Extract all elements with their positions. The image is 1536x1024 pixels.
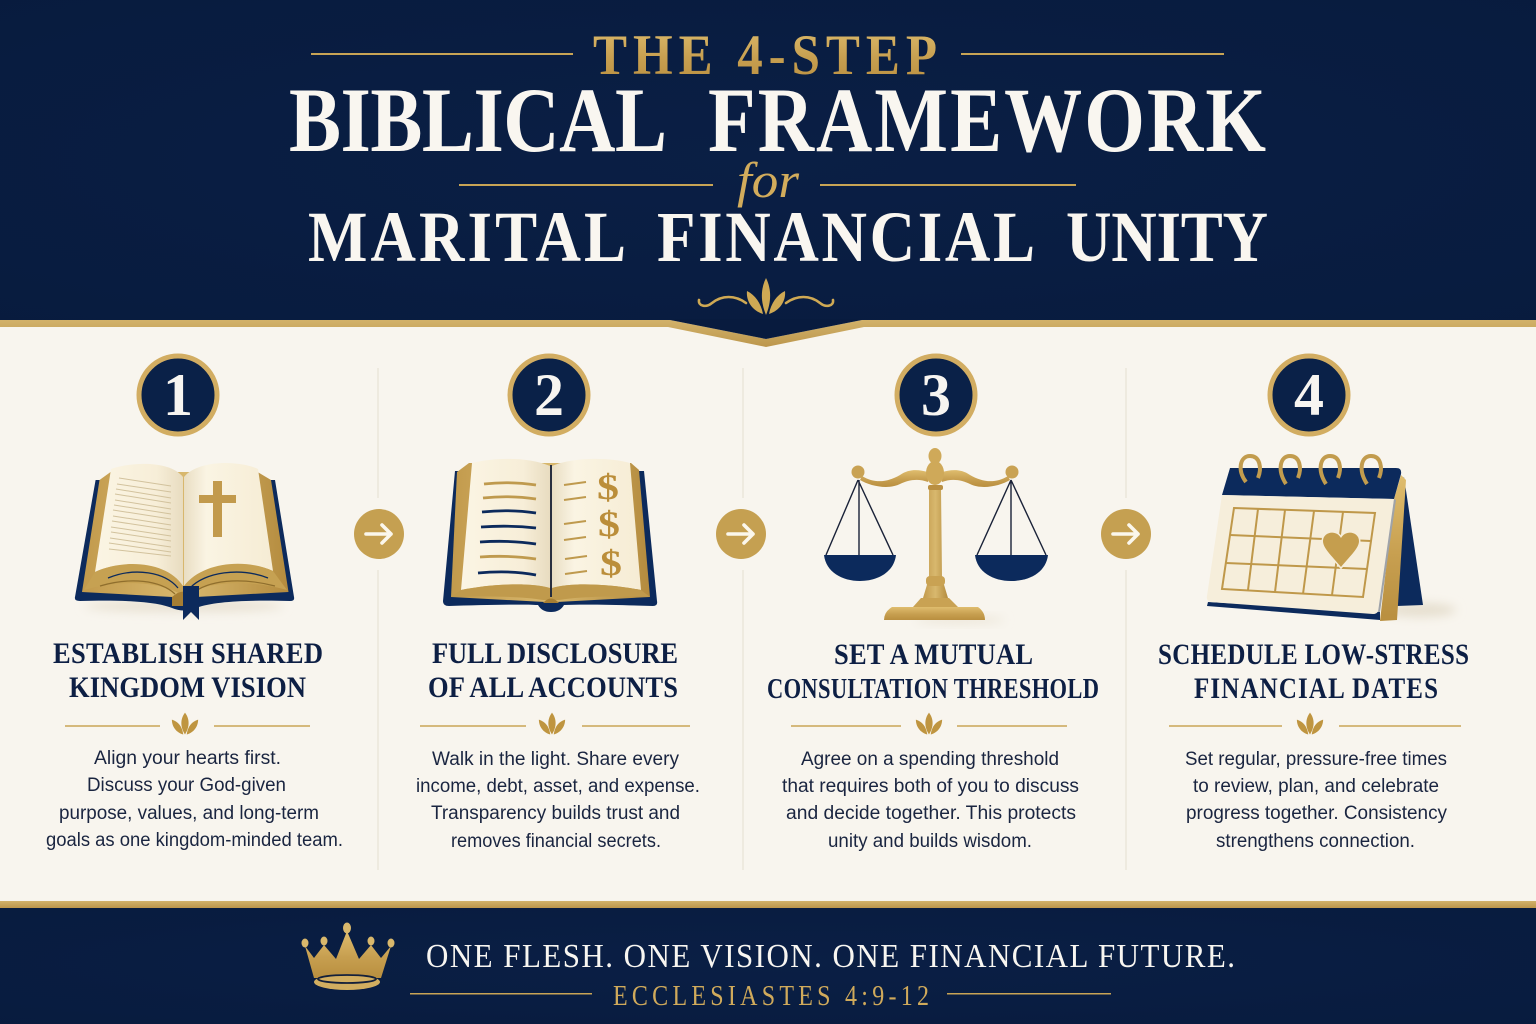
arrow 1 to 2: [354, 509, 404, 559]
icon: open ledger book: $: [600, 543, 622, 583]
body text 2: [416, 749, 700, 852]
heading 4: FINANCIAL DATES: [1194, 671, 1438, 705]
scripture rule right: [947, 993, 1111, 994]
scripture rule left: [410, 993, 592, 994]
heading 3: CONSULTATION THRESHOLD: [767, 673, 1099, 705]
heading 3: [767, 639, 1099, 705]
number badge 2: 2: [534, 362, 564, 428]
number badge 4: [1270, 356, 1348, 434]
ornament divider 3: [791, 713, 1067, 734]
body text 3: [782, 749, 1079, 852]
ornament divider 1: [65, 713, 310, 734]
ornament divider 2: [420, 713, 690, 734]
panel: step 3: [767, 356, 1099, 852]
main title: [289, 70, 1266, 171]
main title: FRAMEWORK: [708, 70, 1266, 171]
main title: BIBLICAL: [289, 70, 667, 171]
body text 4: Set regular, pressure-free times: [1185, 749, 1447, 770]
body text 1: purpose, values, and long-term: [59, 803, 319, 824]
navy chevron fill: [670, 319, 862, 339]
body text 2: Transparency builds trust and: [431, 803, 680, 824]
body text 2: removes financial secrets.: [451, 831, 661, 852]
heading 1: KINGDOM VISION: [69, 672, 306, 704]
footer banner: [0, 901, 1536, 1024]
icon: open ledger book: $: [597, 467, 619, 507]
top rule left: [311, 53, 573, 55]
body text 1: Align your hearts first.: [94, 748, 281, 769]
gold band with chevron: [0, 320, 1536, 347]
body text 2: Walk in the light. Share every: [432, 749, 680, 770]
icon: open bible with cross: [75, 463, 294, 620]
subtitle: MARITAL: [308, 197, 626, 277]
ornament divider 4: [1169, 713, 1461, 734]
column divider 1: [377, 368, 379, 870]
for rule right: [820, 184, 1076, 186]
body text 4: to review, plan, and celebrate: [1193, 776, 1439, 797]
heading 2: [428, 638, 678, 704]
body text 3: and decide together. This protects: [786, 803, 1076, 824]
body text 1: Discuss your God-given: [87, 775, 286, 796]
heading 1: ESTABLISH SHARED: [53, 638, 323, 670]
heading 2: FULL DISCLOSURE: [432, 638, 678, 670]
number badge 1: 1: [163, 362, 193, 428]
heading 2: OF ALL ACCOUNTS: [428, 672, 678, 704]
tagline: ONE FLESH. ONE VISION. ONE FINANCIAL FUTURE.: [426, 938, 1235, 975]
subtitle: UNITY: [1066, 197, 1268, 277]
number badge 3: 3: [921, 362, 951, 428]
body text 3: unity and builds wisdom.: [828, 831, 1032, 852]
eyebrow title: THE 4-STEP: [593, 23, 937, 87]
heading 4: SCHEDULE LOW-STRESS: [1158, 637, 1469, 671]
body text 3: Agree on a spending threshold: [801, 749, 1059, 770]
icon: open ledger book: [443, 459, 657, 612]
arrow 3 to 4: [1101, 509, 1151, 559]
body text 1: goals as one kingdom-minded team.: [46, 830, 343, 851]
panel: step 4: [1158, 356, 1469, 852]
for rule left: [459, 184, 713, 186]
column divider 3: [1125, 368, 1127, 870]
top rule right: [961, 53, 1224, 55]
cream background: [0, 320, 1536, 910]
header banner: [0, 0, 1536, 320]
scripture reference: ECCLESIASTES 4:9-12: [613, 979, 929, 1012]
subtitle: FINANCIAL: [657, 197, 1035, 277]
body text 4: progress together. Consistency: [1186, 803, 1447, 824]
ornament: [699, 278, 833, 315]
icon: desk calendar with heart: [1207, 456, 1456, 621]
body text 4: [1185, 749, 1447, 852]
column divider 2: [742, 368, 744, 870]
body text 1: [46, 748, 343, 851]
number badge 4: 4: [1294, 362, 1324, 428]
icon: crown: [302, 922, 394, 990]
number badge 1: [139, 356, 217, 434]
for word: for: [737, 152, 800, 208]
heading 3: SET A MUTUAL: [834, 639, 1033, 671]
panel: step 1: [46, 356, 343, 851]
heading 1: [53, 638, 323, 704]
arrow 2 to 3: [716, 509, 766, 559]
body text 4: strengthens connection.: [1216, 831, 1415, 852]
body text 2: income, debt, asset, and expense.: [416, 776, 700, 797]
subtitle: [308, 197, 1268, 277]
icon: open ledger book: $: [598, 504, 620, 544]
heading 4: [1158, 637, 1469, 705]
number badge 3: [897, 356, 975, 434]
icon: balance scales: [824, 448, 1048, 623]
number badge 2: [510, 356, 588, 434]
body text 3: that requires both of you to discuss: [782, 776, 1079, 797]
panel: step 2: [416, 356, 700, 852]
